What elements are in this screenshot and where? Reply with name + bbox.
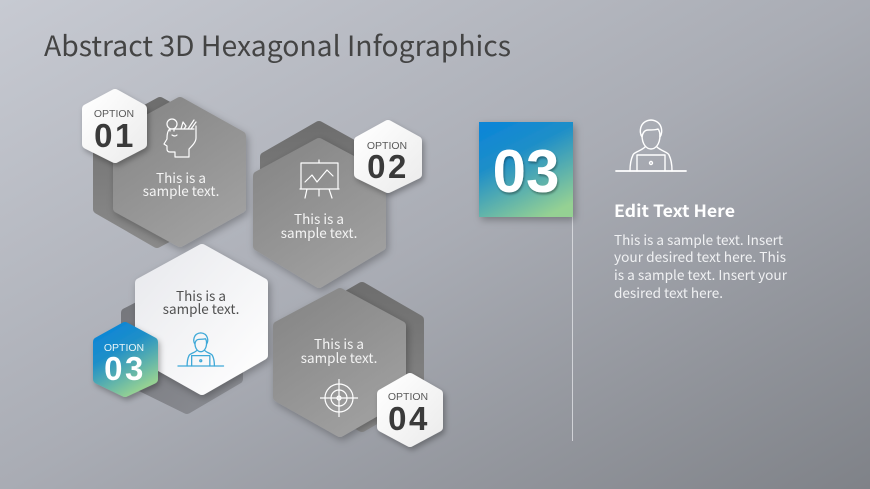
badge: option 01: 01	[94, 117, 136, 154]
icon: target	[320, 379, 358, 417]
icon: person at laptop, blue	[178, 333, 224, 366]
badge: option 03	[98, 327, 153, 392]
number square 03: 03	[493, 138, 559, 205]
badge: option 04: 04	[388, 400, 430, 437]
text: option 02: sample text.	[281, 222, 357, 242]
text: option 04: This is a	[314, 333, 364, 353]
text: option 04: sample text.	[301, 347, 377, 367]
main hexagon 01	[118, 102, 241, 242]
badge: option 03: 03	[104, 350, 146, 387]
vertical divider line	[572, 217, 574, 441]
text: option 01: sample text.	[143, 180, 219, 200]
title: Abstract 3D Hexagonal Infographics	[44, 25, 511, 65]
badge: option 01	[87, 94, 142, 158]
body text: your desired text here. This	[614, 247, 786, 266]
back hexagon 02	[265, 126, 375, 261]
icon: head with ideas	[164, 119, 196, 157]
badge: option 02: OPTION	[367, 140, 407, 152]
hexagon group: option 04	[278, 287, 438, 442]
hexagon group: option 01	[87, 94, 241, 243]
heading: edit text here: Edit Text Here	[614, 198, 735, 222]
text: option 01	[143, 167, 219, 200]
hexagon group: option 02	[258, 125, 417, 283]
back hexagon 03	[126, 284, 238, 409]
badge: option 04: OPTION	[388, 391, 428, 403]
main hexagon 04	[278, 293, 401, 432]
body text: desired text here.	[614, 283, 723, 302]
text: option 02	[281, 208, 357, 242]
badge: option 01: OPTION	[94, 108, 134, 120]
body text: is a sample text. Insert your	[614, 265, 788, 284]
body text: This is a sample text. Insert	[614, 230, 783, 249]
back hexagon 04	[305, 287, 419, 427]
body text	[614, 230, 788, 302]
badge: option 02	[359, 125, 417, 188]
icon: person at laptop, white	[616, 120, 686, 171]
back hexagon 01	[98, 102, 221, 243]
text: option 01: This is a	[156, 167, 206, 187]
icon: presentation board	[300, 160, 339, 198]
text: option 04	[301, 333, 377, 367]
number square 03	[479, 122, 573, 217]
text: option 02: This is a	[294, 208, 344, 228]
main hexagon 02	[258, 143, 381, 283]
badge: option 04	[382, 378, 438, 442]
main hexagon 03	[140, 249, 263, 390]
text: option 03	[163, 285, 239, 318]
badge: option 02: 02	[367, 148, 409, 185]
text: option 03: This is a	[176, 285, 226, 305]
text: option 03: sample text.	[163, 298, 239, 318]
hexagon group: option 03	[98, 249, 263, 409]
badge: option 03: OPTION	[104, 342, 144, 354]
